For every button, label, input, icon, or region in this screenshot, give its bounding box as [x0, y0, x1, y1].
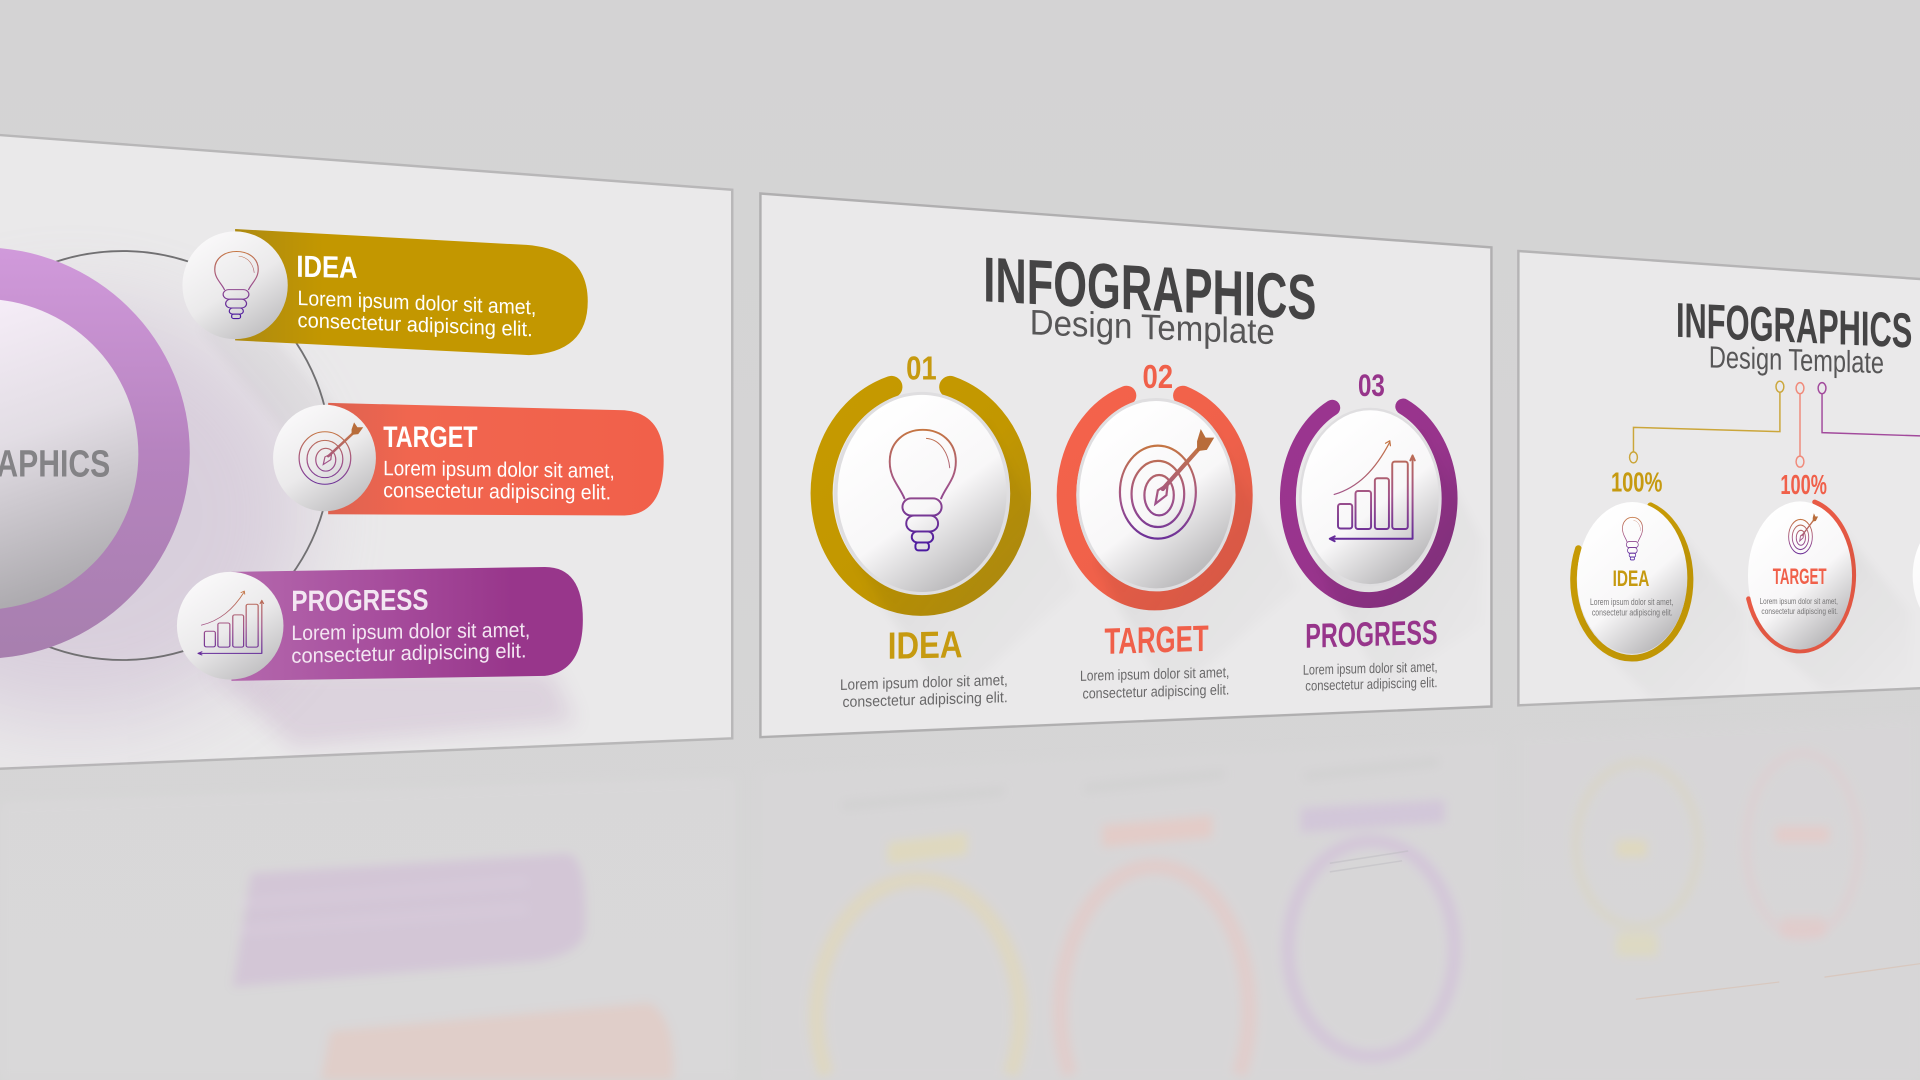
progress disc — [177, 572, 283, 680]
long shadow — [1096, 429, 1298, 698]
purple connector — [1818, 383, 1920, 436]
number 03: 03 — [1358, 367, 1385, 403]
purple ring — [1288, 407, 1450, 600]
long shadow of progress pill — [221, 674, 571, 749]
long shadow — [857, 422, 1078, 704]
idea heading: IDEA — [296, 250, 358, 285]
slide title: INFOGRAPHICS — [983, 243, 1316, 334]
target disc — [273, 405, 376, 511]
idea pill — [182, 229, 588, 355]
description: Lorem ipsum dolor sit amet, — [1303, 658, 1438, 678]
coral arc — [1749, 502, 1854, 651]
description: consectetur adipiscing elit. — [1761, 606, 1838, 616]
white disc — [1748, 501, 1852, 650]
description — [840, 672, 1008, 711]
icon: bar chart — [1330, 441, 1415, 541]
gold arc — [1574, 506, 1690, 658]
icon: lightbulb — [890, 430, 956, 550]
icon: target — [1789, 513, 1818, 554]
idea disc — [182, 231, 288, 339]
gold ring — [822, 387, 1020, 605]
description: Lorem ipsum dolor sit amet, — [1760, 596, 1838, 606]
white disc — [1577, 502, 1687, 654]
progress body text: Lorem ipsum dolor sit amet, — [291, 619, 530, 645]
icon: target — [1120, 429, 1214, 539]
gold connector — [1630, 381, 1784, 463]
description — [1760, 596, 1838, 616]
description — [1303, 658, 1438, 694]
white disc — [1299, 408, 1441, 587]
percent gold: 100% — [1611, 467, 1662, 498]
long shadow — [1316, 429, 1482, 686]
progress body text — [291, 619, 530, 668]
description — [1590, 597, 1673, 618]
step 03 progress — [1288, 367, 1482, 694]
number 01: 01 — [906, 351, 937, 388]
central title fragment: APHICS — [0, 443, 110, 485]
description: consectetur adipiscing elit. — [1305, 674, 1438, 694]
target heading: TARGET — [383, 421, 478, 454]
slide subtitle: Design Template — [1030, 302, 1275, 352]
dial idea — [1574, 467, 1745, 700]
target pill — [273, 403, 664, 516]
description: consectetur adipiscing elit. — [842, 689, 1008, 711]
label idea: IDEA — [888, 624, 962, 668]
description: consectetur adipiscing elit. — [1592, 608, 1673, 618]
idea body text: Lorem ipsum dolor sit amet, — [298, 287, 536, 319]
step 01 idea — [822, 351, 1078, 711]
icon: target — [299, 422, 363, 484]
white disc — [834, 392, 1010, 595]
coral ring — [1067, 396, 1243, 601]
progress body text: consectetur adipiscing elit. — [291, 639, 527, 668]
description: Lorem ipsum dolor sit amet, — [1590, 597, 1673, 607]
idea body text — [298, 287, 536, 341]
target body text — [383, 457, 615, 504]
panel 2: three numbered rings slide — [760, 193, 1491, 737]
label idea: IDEA — [1613, 566, 1649, 591]
percent coral: 100% — [1780, 469, 1827, 500]
dial target — [1748, 469, 1910, 692]
connecting orbit — [48, 250, 325, 661]
label target: TARGET — [1773, 564, 1827, 589]
description: consectetur adipiscing elit. — [1082, 682, 1229, 703]
progress pill — [177, 567, 583, 681]
icon: lightbulb — [215, 252, 258, 319]
number 02: 02 — [1142, 359, 1173, 396]
description: Lorem ipsum dolor sit amet, — [840, 672, 1008, 694]
label progress: PROGRESS — [1305, 614, 1438, 656]
progress heading: PROGRESS — [291, 584, 429, 618]
ring shadow haze — [0, 306, 306, 722]
step 02 target — [1067, 359, 1298, 703]
panel 1: radial list slide — [0, 135, 732, 769]
large purple ring — [0, 247, 190, 659]
label target: TARGET — [1104, 618, 1209, 662]
idea body text: consectetur adipiscing elit. — [298, 309, 533, 341]
icon: bar chart — [198, 591, 264, 655]
description — [1080, 665, 1229, 703]
description: Lorem ipsum dolor sit amet, — [1080, 665, 1229, 685]
coral connector — [1796, 383, 1804, 467]
long shadow of idea pill — [236, 346, 312, 416]
icon: lightbulb — [1622, 517, 1643, 560]
long shadow — [1753, 527, 1910, 692]
panel 3: percentage dials slide — [1518, 251, 1920, 705]
target body text: consectetur adipiscing elit. — [383, 479, 611, 504]
central sphere — [0, 299, 138, 610]
floor reflection of the panels — [0, 716, 1920, 1080]
long shadow — [1582, 527, 1745, 700]
white disc — [1076, 398, 1236, 591]
dial progress sliver — [1913, 512, 1920, 639]
target body text: Lorem ipsum dolor sit amet, — [383, 457, 615, 483]
